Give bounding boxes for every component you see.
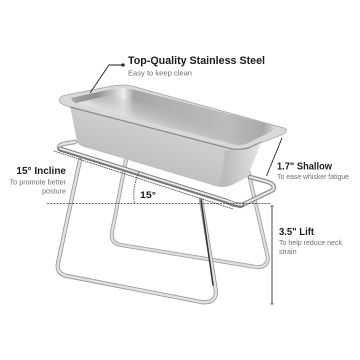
tray inside xyxy=(71,88,276,145)
stand: back leg xyxy=(112,155,268,267)
callout: incline: To promote better xyxy=(10,178,67,186)
tray front rim shadow xyxy=(70,107,262,149)
callout: lift: 3.5" Lift xyxy=(279,227,315,238)
callout: incline: 15° Incline xyxy=(16,166,66,177)
angle label: 15° xyxy=(140,190,156,201)
incline dashed line xyxy=(54,151,233,209)
callout: lift xyxy=(279,227,342,256)
tray rim xyxy=(59,85,287,149)
callout: lift: To help reduce neck xyxy=(279,238,342,247)
tray end wall xyxy=(218,142,262,186)
callout: shallow xyxy=(277,162,349,181)
callout: shallow: To ease whisker fatigue xyxy=(277,172,349,181)
horizontal dashed line xyxy=(47,202,271,204)
angle arc xyxy=(134,172,139,203)
stand: inclined top rail xyxy=(60,148,242,205)
stand: back rail xyxy=(59,142,274,206)
tray outer body xyxy=(70,106,262,187)
stand: front leg xyxy=(58,160,216,302)
callout: incline xyxy=(10,166,67,196)
tray floor xyxy=(76,95,268,145)
callout: shallow: 1.7" Shallow xyxy=(277,162,332,172)
callout: stainless steel: Easy to keep clean xyxy=(128,68,192,78)
callout: stainless steel xyxy=(128,55,265,78)
pointer: stainless steel xyxy=(90,64,124,93)
depth arrow xyxy=(266,138,282,176)
steel tray xyxy=(59,85,287,187)
lift arrow xyxy=(270,206,274,304)
callout: incline: posture xyxy=(42,186,66,196)
callout: stainless steel: Top-Quality Stainless Steel xyxy=(128,55,265,67)
callout: lift: strain xyxy=(279,247,297,256)
